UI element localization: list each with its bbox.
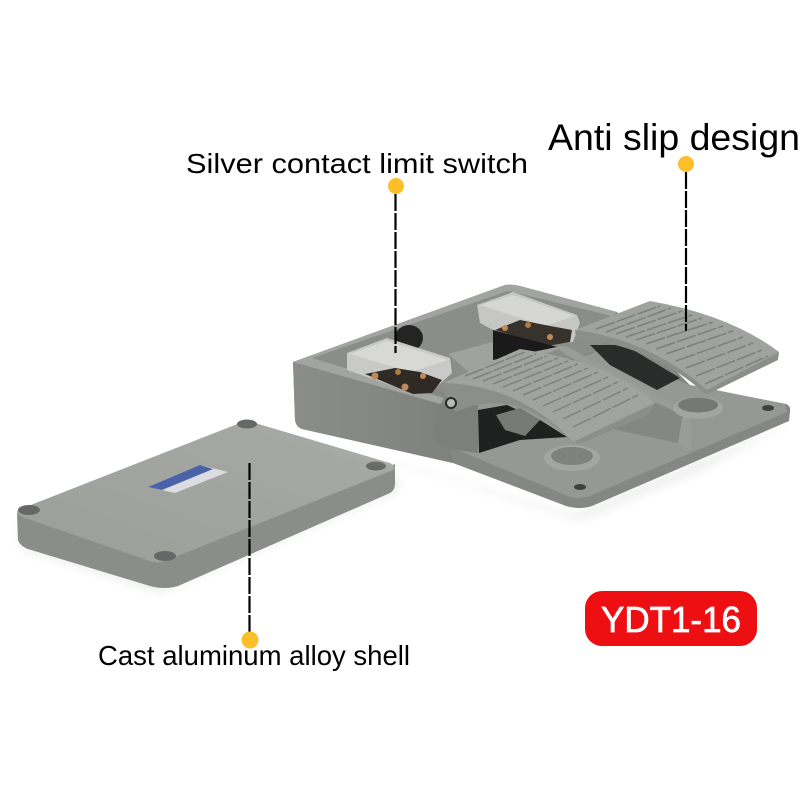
base plate top <box>453 350 787 498</box>
base mounting bosses <box>544 397 723 471</box>
lid label <box>148 465 228 493</box>
marker dot <box>388 178 404 194</box>
label: Silver contact limit switch <box>186 148 528 179</box>
pedal pivot bolt <box>446 398 456 408</box>
callout: cast aluminum alloy shell <box>98 463 410 671</box>
model badge: YDT1-16 <box>601 599 741 640</box>
box left outer wall <box>293 362 453 463</box>
shadow <box>300 420 795 520</box>
front pedal <box>443 349 655 443</box>
leader line <box>394 194 397 353</box>
callout: anti slip design <box>548 117 800 331</box>
rear pedal <box>575 301 779 394</box>
leader line <box>685 172 687 331</box>
box floor <box>448 342 560 382</box>
leader line <box>248 463 251 633</box>
marker dot <box>242 632 258 648</box>
lid screw holes <box>18 420 386 561</box>
product: foot switch body <box>293 285 795 520</box>
label: Cast aluminum alloy shell <box>98 640 410 671</box>
marker dot <box>678 156 694 172</box>
limit switch: rear <box>477 292 580 360</box>
product: aluminum lid <box>17 420 400 592</box>
label: Anti slip design <box>548 117 800 158</box>
switch roller <box>496 408 540 436</box>
cable hole <box>395 325 423 351</box>
silhouette <box>293 285 790 508</box>
black block <box>493 330 557 360</box>
dark recess under front pedal <box>478 405 567 453</box>
rib wall between pedals <box>607 403 683 443</box>
box interior back wall <box>306 291 612 392</box>
dark recess under rear pedal <box>590 345 680 390</box>
housing wall <box>432 404 478 453</box>
callout: silver contact limit switch <box>186 148 528 353</box>
model badge <box>585 591 757 646</box>
limit switch: front <box>347 338 452 394</box>
box rim <box>293 285 617 404</box>
base screw holes <box>574 405 774 490</box>
